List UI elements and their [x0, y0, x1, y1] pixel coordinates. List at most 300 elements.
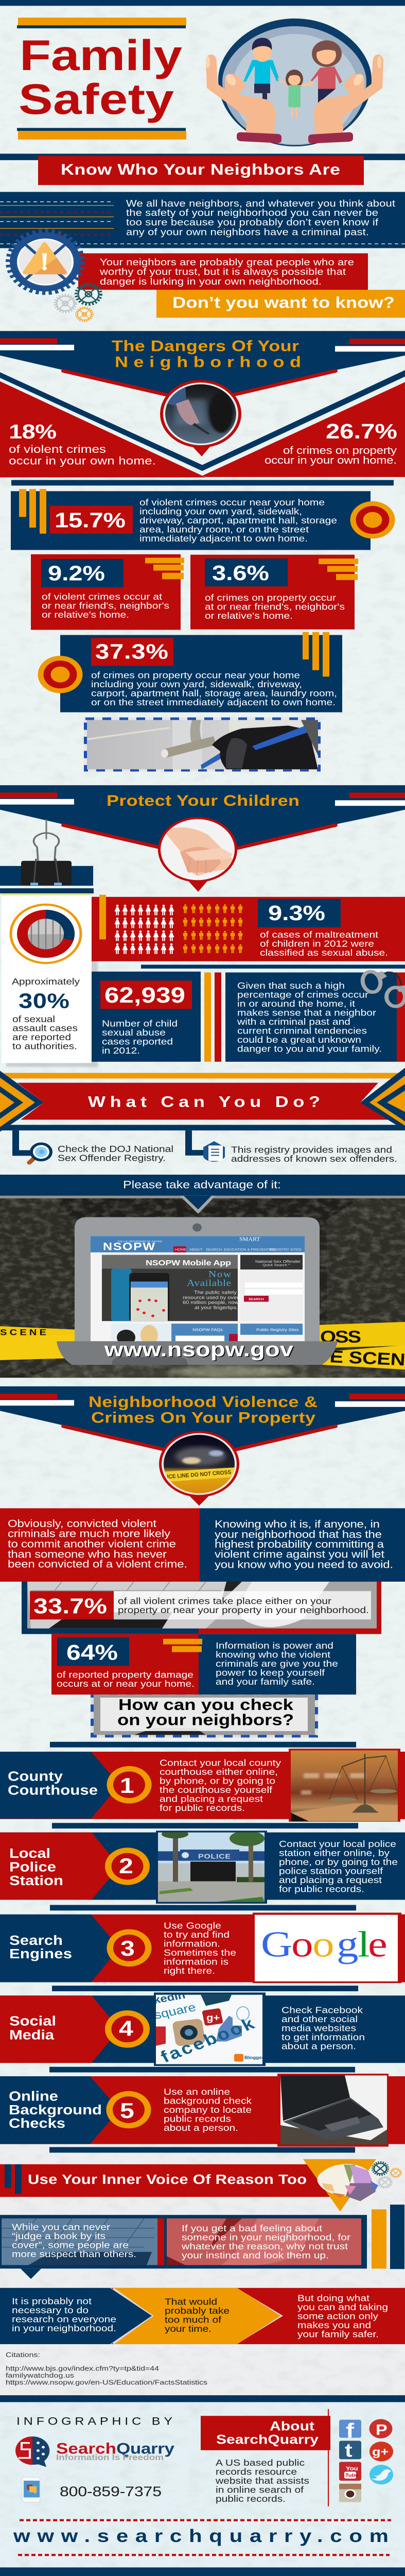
row: social media: about a person.	[281, 2042, 356, 2052]
row: online background checks: background check	[164, 2096, 252, 2106]
callout: neighbors: worthy of your trust, but it is always possible that	[99, 267, 346, 277]
heading: neighborhood violence and crimes on your property: Crimes On Your Property	[91, 1409, 316, 1427]
callout: don't you want to know	[156, 290, 405, 318]
step 3: makes you and	[297, 2321, 371, 2331]
logo: searchquarry	[15, 2436, 174, 2467]
panel: knowing who it is: your neighborhood that has the	[215, 1529, 382, 1540]
about searchquarry: records resource	[216, 2467, 297, 2477]
panel: information is power: and your family safe.	[216, 1677, 315, 1687]
row: online background checks	[0, 2074, 405, 2147]
panel: convicted criminals	[0, 1509, 200, 1582]
panel: 15.7 percent: immediately adjacent to own home.	[139, 534, 308, 544]
panel: 64 percent: occurs at or near your home.	[57, 1680, 195, 1689]
panel: trust your instinct: whatever the reason, why not trust	[181, 2242, 348, 2251]
panel: given that such a high percentage: could be a great unknown	[237, 1036, 361, 1045]
row: county courthouse: County	[8, 1769, 63, 1784]
website screenshot: Available	[187, 1278, 231, 1288]
step 3	[297, 2294, 388, 2340]
number badge 1	[107, 1766, 151, 1803]
banner: what can you do	[0, 1067, 405, 1132]
row: county courthouse: Contact your local county	[160, 1758, 281, 1768]
website footer: www.searchquarry.com	[13, 2526, 389, 2546]
step 3: your family safer.	[297, 2330, 379, 2340]
panel: trust your instinct	[0, 2215, 367, 2279]
navy band	[0, 154, 405, 160]
heading: protect your children: Protect Your Children	[107, 792, 300, 809]
photo: social media logos: facebook	[157, 2014, 258, 2066]
caution tape right	[316, 1322, 405, 1369]
row: online background checks: company to locate	[164, 2105, 252, 2115]
panel: 37.3 percent: of crimes on property occur near your home	[91, 671, 300, 681]
logo: google: G	[261, 1924, 292, 1964]
photo: police building	[158, 1830, 265, 1902]
icon: pinterest	[369, 2419, 392, 2438]
website screenshot: SMART	[239, 1236, 260, 1242]
logo: google: g	[337, 1924, 358, 1964]
icon: document	[203, 1141, 225, 1162]
photo: gloved burglar at door	[84, 717, 321, 772]
text: check the registry	[58, 1144, 173, 1163]
mother figure	[311, 40, 342, 103]
panel: 64 percent	[51, 1634, 199, 1694]
tablet with nsopw website	[57, 1217, 338, 1365]
panel: 9.3 percent: 9.3%	[268, 901, 325, 925]
panel: knowing who it is: you know who you need to avoid.	[215, 1558, 393, 1570]
panel: trust your instinct: your instinct and look them up.	[182, 2251, 329, 2261]
logo: google: e	[368, 1924, 388, 1964]
callout: neighbors: danger is lurking in your own neighborhood.	[100, 277, 322, 287]
intro panel: any of your own neighbors have a criminal past.	[126, 227, 369, 238]
title block: Family	[20, 31, 182, 79]
panel: 9.3 percent	[92, 895, 405, 961]
icon: target	[38, 656, 82, 693]
citations: familywatchdog.us	[6, 2372, 74, 2380]
icon: google plus: g+	[372, 2446, 389, 2459]
stat: 18 percent	[9, 420, 156, 467]
panel: convicted criminals: to commit another violent crime	[8, 1538, 176, 1550]
heading: use your inner voice of reason too	[0, 2164, 332, 2197]
panel: knowing who it is: Knowing who it is, if anyone, in	[215, 1518, 380, 1530]
band: please take advantage: Please take advantage of it:	[123, 1179, 281, 1191]
step 1: necessary to do	[12, 2306, 89, 2316]
step 2: too much of	[165, 2315, 222, 2325]
panel: 9.2 percent: or near friend's, neighbor's	[42, 601, 169, 611]
panel: 62,939: 62,939	[104, 983, 185, 1007]
panel: hanging note with 30 percent stat: Approximately	[12, 977, 80, 987]
row: local police station	[0, 1830, 405, 1904]
row: online background checks: Online	[9, 2089, 58, 2104]
row: search engines: Sometimes the	[164, 1948, 236, 1958]
panel: 9.2 percent: 9.2%	[48, 562, 105, 585]
intro panel: We all have neighbors, and whatever you think about	[126, 198, 395, 209]
panel: 9.3 percent: of children in 2012 were	[260, 939, 374, 949]
step 1	[12, 2297, 116, 2334]
panel: 33.7 percent: of all violent crimes take place either on your	[118, 1597, 332, 1606]
website address: www.nsopw.gov	[105, 1340, 294, 1362]
photo: knife in dark hallway	[160, 380, 241, 456]
step 2: your time.	[165, 2324, 212, 2334]
right hand	[314, 55, 383, 134]
website screenshot: 60 million people, now	[183, 1300, 239, 1306]
logo: google	[261, 1924, 388, 1964]
step 2: That would	[165, 2297, 217, 2307]
panel: hanging note with 30 percent stat: 30%	[19, 989, 69, 1013]
number badge 4: 4	[119, 2016, 133, 2041]
panel: 62,939	[92, 972, 201, 1062]
row: online background checks: Checks	[9, 2116, 65, 2131]
photo: police line at night: ICE LINE DO NOT CROSS	[167, 1469, 232, 1480]
panel: given that such a high percentage: Given that such a high	[237, 981, 345, 991]
panel: 15.7 percent: of violent crimes occur near your home	[139, 498, 325, 507]
icon: warning gear	[9, 232, 81, 292]
icon: handcuffs	[361, 971, 405, 1006]
callout: neighbors	[78, 253, 368, 290]
row: social media: Social	[9, 2014, 56, 2029]
infographic by label: INFOGRAPHIC BY	[16, 2415, 172, 2427]
panel: hanging note with 30 percent stat: assault cases	[12, 1024, 78, 1033]
citations: https://www.nsopw.gov/en-US/Education/FactsStatistics	[6, 2379, 207, 2386]
heading: the dangers of your neighborhood: Neighborhood	[115, 353, 301, 371]
row: search engines: Engines	[9, 1946, 72, 1961]
step 3: some action only	[297, 2312, 378, 2321]
row: county courthouse	[0, 1749, 405, 1822]
title block: Safety	[19, 75, 174, 123]
photo: scales of justice	[291, 1751, 398, 1821]
text: check the registry: Sex Offender Registry.	[58, 1154, 166, 1163]
photo: police building: POLICE	[198, 1853, 231, 1860]
website screenshot: THE U.S. DEPARTMENT OF JUSTICE	[117, 1240, 162, 1243]
number badge 1: 1	[120, 1773, 134, 1798]
row: local police station: police station yourself	[279, 1867, 383, 1876]
photo: social media logos: kedIn	[152, 1989, 186, 2006]
panel: 37.3 percent	[38, 632, 342, 712]
icon: instagram	[339, 2484, 361, 2502]
photo: police line at night	[159, 1431, 239, 1505]
panel: dangers lower red triangles	[0, 370, 405, 478]
photo: social media logos: square	[152, 2001, 198, 2022]
left hand	[206, 55, 275, 134]
website screenshot: NSOPW	[103, 1241, 155, 1252]
icon: pinterest: P	[376, 2421, 388, 2438]
photo: tinted keyboard	[2, 2218, 361, 2265]
stat: 26.7 percent	[265, 419, 397, 466]
heading: protect your children	[0, 785, 405, 849]
panel: trust your instinct: “judge a book by its	[12, 2231, 105, 2241]
panel: given that such a high percentage: with a criminal past and	[237, 1018, 350, 1027]
heading: neighborhood violence and crimes on your property: Neighborhood Violence &	[89, 1394, 318, 1411]
title block	[17, 18, 186, 140]
row: search engines: to try and find	[164, 1930, 230, 1940]
panel: trust your instinct: If you get a bad feeling about	[182, 2224, 323, 2233]
number badge 4	[105, 2010, 150, 2048]
about searchquarry: A US based public	[216, 2458, 305, 2468]
icon: youtube: Tube	[345, 2473, 359, 2478]
step 2	[165, 2297, 230, 2334]
website screenshot: ABOUT	[189, 1248, 203, 1251]
callout: neighbors: Your neighbors are probably great people who are	[100, 258, 354, 268]
icon: tumblr	[339, 2439, 361, 2461]
caution tape right: E SCEN	[329, 1347, 405, 1369]
panel: trust your instinct: someone in your neighborhood, for	[182, 2233, 351, 2243]
about searchquarry: in online search of	[216, 2485, 304, 2495]
connector arrow left	[15, 1130, 32, 1153]
photo: keyboard and mouse	[27, 1582, 377, 1629]
panel: 3.6 percent	[190, 555, 358, 630]
callout: don't you want to know: Don’t you want to know?	[172, 294, 395, 312]
row: local police station: Police	[9, 1860, 56, 1875]
intro panel: the safety of your neighborhood you can never be	[126, 208, 378, 218]
icon: tumblr: t	[345, 2439, 353, 2461]
photo: laptop	[280, 2075, 387, 2144]
panel: convicted criminals: than someone who has never	[8, 1548, 167, 1560]
website screenshot: Now	[208, 1270, 231, 1280]
heading: the dangers of your neighborhood	[0, 331, 405, 395]
heading: know who your neighbors are	[38, 156, 364, 185]
connector arrow right	[188, 1130, 206, 1153]
cuffs	[237, 132, 281, 143]
icon: binder clip	[21, 820, 72, 885]
website screenshot: NSOPW FAQs	[192, 1328, 223, 1332]
panel: knowing who it is: highest probability committing a	[215, 1538, 384, 1550]
panel: convicted criminals: criminals are much more likely	[8, 1528, 170, 1539]
caution tape left	[0, 1326, 77, 1360]
logo: searchquarry: Quarry	[116, 2440, 174, 2457]
panel: how can you check on your neighbors: on your neighbors?	[117, 1711, 294, 1729]
website screenshot	[91, 1236, 305, 1346]
panel: 37.3 percent: including your own yard, sidewalk, driveway,	[91, 680, 302, 690]
website screenshot: SEARCH	[206, 1248, 222, 1251]
panel: 15.7 percent: 15.7%	[55, 508, 126, 532]
panel: given that such a high percentage: percentage of crimes occur	[237, 990, 369, 1000]
number badge 5	[106, 2091, 151, 2128]
panel: 62,939: in 2012.	[102, 1046, 140, 1056]
panel: 64 percent: of reported property damage	[57, 1670, 193, 1680]
stat: 26.7 percent: 26.7%	[326, 419, 397, 443]
number badge 3: 3	[120, 1936, 135, 1960]
panel: information is power: Information is power and	[216, 1641, 333, 1651]
icon: magnifier	[29, 1144, 51, 1163]
row: social media: Check Facebook	[281, 2006, 363, 2015]
panel: 33.7 percent: property or near your property in your neighborhood.	[118, 1605, 369, 1615]
panel: how can you check on your neighbors: How can you check	[118, 1697, 293, 1714]
panel: 62,939: cases reported	[102, 1037, 173, 1047]
row: local police station: station either online, by	[279, 1849, 390, 1858]
icon: youtube: You	[346, 2465, 358, 2472]
heading: the dangers of your neighborhood: The Dangers Of Your	[112, 337, 299, 355]
row: social media: and other social	[281, 2015, 358, 2025]
chevron flow: research	[0, 2288, 405, 2344]
row: county courthouse: Courthouse	[8, 1783, 98, 1798]
website address: www.nsopw.gov	[104, 1338, 293, 1361]
stat: 18 percent: occur in your own home.	[9, 455, 156, 467]
website screenshot: Public Registry Sites	[256, 1328, 298, 1332]
panel: hanging note with 30 percent stat: of sexual	[12, 1015, 55, 1025]
fingernails	[206, 56, 381, 87]
panel: 9.2 percent: of violent crimes occur at	[42, 592, 163, 602]
row: search engines: right there.	[164, 1966, 215, 1976]
about searchquarry: SearchQuarry	[216, 2432, 319, 2447]
step 1: research on everyone	[12, 2315, 116, 2325]
website screenshot: EDUCATION & PREVENTION	[224, 1248, 276, 1251]
panel: given that such a high percentage	[225, 971, 405, 1062]
child figure	[277, 70, 314, 118]
panel: 3.6 percent: or relative's home.	[205, 611, 293, 621]
heading: use your inner voice of reason too: Use Your Inner Voice Of Reason Too	[28, 2173, 307, 2188]
banner: what can you do: What Can You Do?	[88, 1093, 320, 1111]
row: local police station: Local	[9, 1846, 50, 1861]
about searchquarry: public records.	[216, 2494, 286, 2504]
right chevrons	[360, 1067, 405, 1130]
panel: 15.7 percent: area, laundry room, or on the street	[139, 525, 309, 535]
panel: convicted criminals: been convicted of a violent crime.	[8, 1558, 187, 1570]
icon: facebook: f	[346, 2419, 354, 2443]
panel: 9.3 percent: classified as sexual abuse.	[260, 948, 388, 958]
citations: http://www.bjs.gov/index.cfm?ty=tp&tid=44	[6, 2365, 159, 2372]
row: online background checks: about a person.	[164, 2123, 238, 2133]
row: county courthouse: by phone, or by going to	[160, 1776, 275, 1786]
icon: brain and gears on triangle	[303, 2159, 401, 2211]
panel: 15.7 percent: including your own yard, sidewalk,	[139, 507, 302, 517]
panel: information is power: power to keep yourself	[216, 1668, 325, 1678]
panel: given that such a high percentage: makes sense that a neighbor	[237, 1008, 377, 1018]
panel: 37.3 percent: or on the street immediately adjacent to own home.	[91, 698, 336, 708]
panel: knowing who it is: violent crime against you will let	[215, 1548, 384, 1560]
panel: 9.2 percent	[31, 554, 184, 630]
left chevrons	[0, 1071, 44, 1132]
panel: 62,939: sexual abuse	[102, 1028, 166, 1038]
photo: social media logos: Blogger	[244, 2055, 264, 2060]
panel: trust your instinct: more suspect than others.	[12, 2249, 136, 2259]
photo: social media logos	[152, 1989, 264, 2066]
row: search engines	[0, 1912, 405, 1983]
panel: 37.3 percent: carport, apartment hall, storage area, laundry room,	[91, 689, 337, 699]
panel: 37.3 percent: 37.3%	[95, 639, 168, 663]
text: registry provides images: addresses of known sex offenders.	[231, 1155, 397, 1164]
website screenshot: NSOPW Mobile App	[146, 1258, 231, 1267]
row: county courthouse: for public records.	[160, 1804, 245, 1814]
number badge 3	[107, 1929, 151, 1967]
website screenshot: at your fingertips.	[195, 1306, 238, 1311]
caution tape right: OSS	[320, 1327, 361, 1346]
photo: adult holding child's hand	[158, 817, 237, 892]
panel: 15.7 percent: driveway, carport, apartment hall, storage	[139, 516, 337, 526]
heading: neighborhood violence and crimes on your property	[0, 1386, 405, 1450]
panel: 9.2 percent: or relative's home.	[42, 611, 129, 620]
icon: google plus	[369, 2442, 393, 2462]
row: county courthouse: courthouse either online,	[160, 1768, 278, 1777]
panel: hanging note with 30 percent stat: to authorities.	[12, 1042, 77, 1052]
icon: facebook	[339, 2419, 361, 2443]
chart: donut 30 percent	[11, 905, 81, 963]
row: search engines: Search	[9, 1933, 63, 1948]
website screenshot: The public safety	[194, 1290, 237, 1295]
panel: 9.3 percent: of cases of maltreatment	[260, 930, 379, 940]
step 1: in your neighborhood.	[12, 2324, 116, 2334]
citations: Citations:	[6, 2351, 40, 2359]
logo: google: o	[312, 1924, 334, 1964]
number badge 2	[105, 1848, 150, 1885]
photo: social media logos: g+	[206, 2013, 220, 2023]
icon: twitter	[369, 2465, 393, 2484]
panel: information is power	[163, 1634, 356, 1694]
stat: 26.7 percent: of crimes on property	[283, 445, 397, 456]
website screenshot: REGISTRY SITES	[270, 1248, 302, 1251]
row: online background checks: public records	[164, 2114, 231, 2124]
photo background: dark crime scene room	[0, 1198, 405, 1378]
logo: google: o	[291, 1924, 313, 1964]
panel: 3.6 percent: 3.6%	[212, 561, 269, 585]
text: registry provides images: This registry provides images and	[231, 1145, 392, 1155]
panel: 64 percent: 64%	[66, 1640, 118, 1665]
panel: knowing who it is	[200, 1509, 405, 1582]
panel: trust your instinct: While you can never	[12, 2223, 111, 2232]
panel: given that such a high percentage: danger to you and your family.	[237, 1044, 382, 1054]
stat: 26.7 percent: occur in your own home.	[265, 454, 397, 466]
citations	[6, 2351, 207, 2386]
step 3: you can and taking	[297, 2303, 388, 2313]
phone number: 800-859-7375	[60, 2484, 162, 2499]
step 2: probably take	[165, 2306, 230, 2316]
number badge 2: 2	[119, 1854, 133, 1878]
row: local police station: Station	[9, 1874, 63, 1889]
panel: 15.7 percent	[11, 489, 395, 550]
logo: searchquarry: Search	[56, 2440, 116, 2457]
row: search engines: information.	[164, 1939, 220, 1949]
text: registry provides images	[231, 1145, 397, 1164]
row: county courthouse: the courthouse yourself	[160, 1786, 273, 1795]
row: online background checks: Use an online	[164, 2087, 230, 2097]
about searchquarry: website that assists	[215, 2476, 309, 2486]
panel: given that such a high percentage: current criminal tendencies	[237, 1026, 367, 1036]
row: online background checks: Background	[9, 2103, 102, 2118]
social media icons	[339, 2419, 393, 2502]
panel: given that such a high percentage: in or around the home, it	[237, 999, 356, 1009]
text: check the registry: Check the DOJ National	[58, 1144, 173, 1154]
illustration: hands protecting a family	[206, 19, 383, 146]
panel: 3.6 percent: at or near friend's, neighbor's	[205, 602, 345, 612]
panel: 33.7 percent	[22, 1582, 381, 1634]
icon: small gears	[55, 284, 101, 321]
panel: information is power: knowing who the violent	[216, 1650, 331, 1660]
top bar	[0, 0, 405, 6]
row: local police station: and placing a request	[279, 1876, 382, 1886]
about searchquarry	[201, 2416, 330, 2504]
panel: how can you check on your neighbors	[91, 1694, 318, 1737]
caution tape left: SCENE	[0, 1327, 46, 1337]
website screenshot: SEARCH	[249, 1298, 264, 1301]
intro panel	[0, 192, 405, 248]
about searchquarry: About	[270, 2419, 314, 2433]
father figure	[243, 38, 279, 101]
icon: target	[350, 501, 395, 538]
step 1: It is probably not	[12, 2297, 92, 2307]
row: social media: Media	[9, 2028, 55, 2043]
icon: phone	[22, 2477, 40, 2502]
band: please take advantage	[0, 1175, 405, 1214]
row: social media: to get information	[281, 2033, 365, 2043]
row: social media: media websites	[281, 2024, 356, 2033]
intro panel: too sure because you probably don’t even know if	[126, 217, 378, 228]
website screenshot: HOME	[175, 1248, 187, 1251]
row: local police station: phone, or by going to the	[279, 1858, 398, 1868]
row: search engines: information is	[164, 1957, 228, 1967]
website screenshot: National Sex Offender	[255, 1259, 301, 1264]
row: social media	[0, 1989, 405, 2066]
stat: 18 percent: 18%	[9, 420, 57, 443]
logo: searchquarry: Information Is Freedom	[56, 2453, 164, 2462]
number badge 5: 5	[120, 2098, 134, 2123]
panel: 33.7 percent: 33.7%	[33, 1594, 107, 1618]
